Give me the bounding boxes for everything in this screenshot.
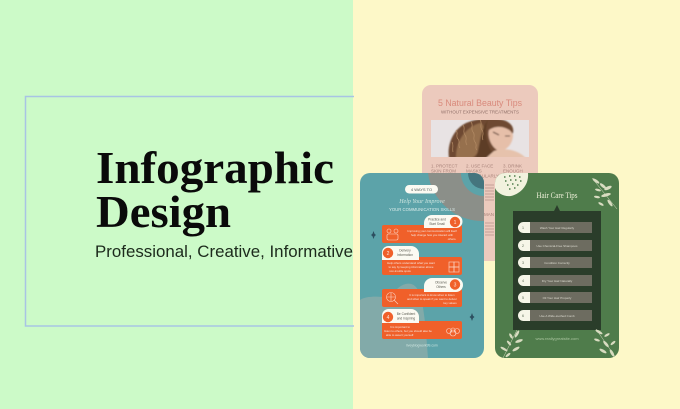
beauty card small text lines [485, 185, 494, 235]
tip row 5: Oil Your Hair Properly [543, 296, 572, 300]
tip 2 [382, 246, 462, 275]
title [96, 142, 334, 237]
beauty card tips text: 2. USE FACE [466, 164, 493, 168]
tip 2: 2 [387, 251, 390, 257]
tip row 5 [518, 292, 592, 303]
tip 4: 4 [387, 315, 390, 321]
white blob with dots [495, 173, 528, 196]
tip 4: Be Confident [397, 312, 415, 316]
tip 1: Start Small [429, 222, 445, 226]
icon: flower [446, 328, 460, 336]
tip row 2: 2 [522, 244, 524, 248]
tip row 1 [518, 222, 592, 233]
decorative frame [26, 96, 354, 326]
subtitle: Professional, Creative, Informative [95, 243, 353, 261]
tip 4: and Inspiring [397, 316, 415, 320]
beauty card tips text [431, 164, 523, 217]
tip 1: Practice and [428, 218, 446, 222]
beauty card tips text: REGULARLY [472, 174, 499, 178]
tip 1: Improving your communication will itself [407, 229, 457, 233]
tip 3: 3 [454, 282, 457, 288]
tip 1: 1 [454, 220, 457, 226]
tip 2: Information [397, 253, 413, 257]
icon: boxes [449, 262, 459, 272]
tip row 2 [518, 240, 592, 251]
tip row 4 [518, 275, 592, 286]
tip 3: and when to speak if you want to deliver [407, 297, 457, 301]
tip 4: It is important to [390, 325, 410, 329]
tip row 4: 4 [522, 279, 524, 283]
tip 2: to say by keeping information above [389, 265, 434, 269]
beauty card heading: 5 Natural Beauty Tips [438, 98, 522, 108]
title: Design [96, 186, 231, 237]
tip 1 [382, 215, 462, 243]
sparkle left [371, 231, 376, 239]
leaves bottom right [594, 329, 616, 358]
hair card footer link: www.reallygreatsite.com [535, 336, 579, 341]
tip 4 [382, 309, 462, 339]
tip row 4: Dry Your Hair Naturally [542, 279, 573, 283]
pill: 4 ways to [405, 185, 438, 194]
pill: 4 ways to: 4 WAYS TO [411, 187, 432, 192]
leaves bottom left [500, 330, 523, 358]
panel: beauty tips card [422, 85, 538, 261]
beauty card tips text: ENOUGH [503, 168, 523, 174]
beauty card tips text: 3. DRINK [503, 164, 522, 168]
background: green panel [0, 0, 353, 409]
tip row 1: Wash Your Hair Regularly [540, 226, 575, 230]
script heading: Help Your Improve [398, 199, 445, 205]
tip 4: able to assert yourself. [386, 333, 414, 337]
tip row 6: 6 [522, 314, 524, 318]
top right circle shape [428, 173, 484, 221]
photo: woman with curly hair [431, 119, 529, 158]
beauty card tips text: MASKS [466, 168, 482, 174]
tip row 3 [518, 257, 592, 268]
tip 1: others. [448, 237, 456, 241]
heading: communication skills: YOUR COMMUNICATION SKILLS [389, 207, 455, 212]
tip row 6: Use A Wide-toothed Comb [539, 314, 575, 318]
beauty card subheading: WITHOUT EXPENSIVE TREATMENTS [441, 110, 519, 114]
tip 2: non-trouble spots [389, 269, 411, 273]
tip 3 [382, 278, 463, 307]
icon: magnifier [386, 292, 398, 304]
tip row 2: Use Chemical-Free Shampoos [536, 244, 578, 248]
sparkle right [470, 313, 474, 321]
dark tips panel [513, 205, 601, 330]
tip 3: key values [443, 301, 457, 305]
tip row 3: 3 [522, 261, 524, 265]
panel: hair care tips card [495, 173, 619, 358]
beauty card tips text: 1. PROTECT [431, 164, 458, 168]
tip row 6 [518, 310, 592, 321]
tip 3: Others [436, 285, 446, 289]
beauty card tips text: MAN [484, 212, 494, 217]
tip 2: Help others understand what you want [387, 261, 435, 265]
tip row 3: Condition Correctly [544, 261, 570, 265]
tip row 5: 5 [522, 296, 524, 300]
tip row 1: 1 [522, 226, 524, 230]
tip 4: listen to others, but you should also be [384, 329, 432, 333]
icon: people [387, 229, 398, 240]
tip 2: Delivery [399, 248, 411, 252]
tip 3: It is important to know when to listen [409, 293, 455, 297]
hair card heading: Hair Care Tips [536, 190, 578, 200]
title: Infographic [96, 142, 334, 193]
tip rows [518, 222, 592, 321]
panel: communication skills card [360, 173, 484, 358]
tip 1: help change how you interact with [411, 233, 454, 237]
leaves top right [592, 178, 617, 209]
footer link: liveyblogwork99.com [406, 344, 438, 348]
tip 3: Observe [435, 280, 447, 284]
bottom left blob [360, 284, 428, 358]
beauty card tips text: SKIN FROM [431, 168, 456, 174]
